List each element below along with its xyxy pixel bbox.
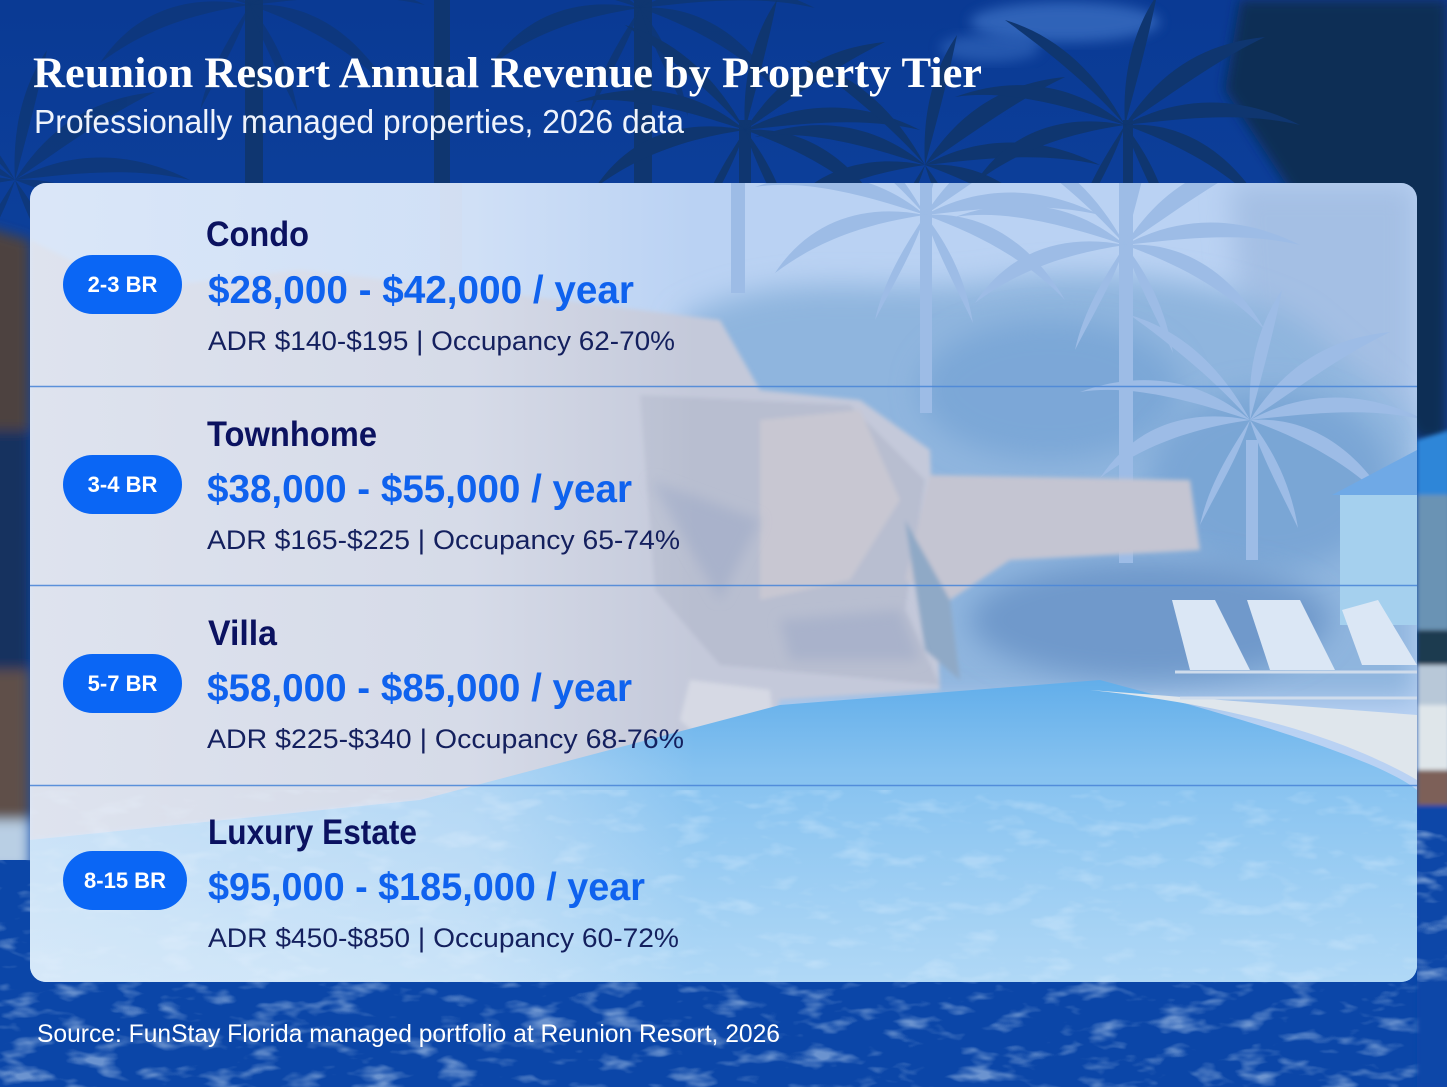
revenue range: Luxury Estate: $95,000 - $185,000 / year <box>208 866 645 909</box>
tier name: Townhome: Townhome <box>207 415 377 454</box>
metrics: Luxury Estate: ADR $450-$850 | Occupancy 60-72% <box>208 923 679 953</box>
palms against the sky <box>0 0 1300 288</box>
rocks <box>30 240 1200 840</box>
badge: 2-3 BR: 2-3 BR <box>88 272 157 297</box>
right edge scene <box>1417 430 1447 1087</box>
badge: 3-4 BR <box>63 455 182 514</box>
metrics: Townhome: ADR $165-$225 | Occupancy 65-74% <box>207 525 680 555</box>
tier name: Luxury Estate: Luxury Estate <box>208 813 417 852</box>
subtitle: Professionally managed properties, 2026 data <box>34 103 685 140</box>
dark tree top right <box>1225 0 1447 440</box>
row: Villa <box>63 614 684 754</box>
row: Townhome <box>63 415 680 555</box>
row: Condo <box>63 215 675 356</box>
panel: property tiers glass card <box>30 183 1417 982</box>
badge: 8-15 BR: 8-15 BR <box>84 868 166 893</box>
row: Luxury Estate <box>63 813 679 953</box>
tier name: Condo: Condo <box>206 215 309 254</box>
deep water <box>0 860 1447 1087</box>
revenue range: Condo: $28,000 - $42,000 / year <box>208 269 634 312</box>
badge: 5-7 BR: 5-7 BR <box>88 671 157 696</box>
white wash over left side <box>30 183 659 982</box>
badge: 8-15 BR <box>63 851 187 910</box>
badge: 5-7 BR <box>63 654 182 713</box>
source note: Source: FunStay Florida managed portfolio at Reunion Resort, 2026 <box>37 1020 780 1048</box>
left edge rocks and water <box>0 225 30 870</box>
cabana and loungers <box>1332 450 1417 495</box>
metrics: Villa: ADR $225-$340 | Occupancy 68-76% <box>207 724 684 754</box>
tier name: Villa: Villa <box>208 614 278 653</box>
badge: 3-4 BR: 3-4 BR <box>88 472 157 497</box>
metrics: Condo: ADR $140-$195 | Occupancy 62-70% <box>208 326 675 356</box>
panel scene seen through glass <box>30 183 1417 982</box>
deck <box>1090 690 1417 780</box>
pool <box>30 680 1417 982</box>
title: Reunion Resort Annual Revenue by Property Tier <box>33 50 982 97</box>
badge: 2-3 BR <box>63 255 182 314</box>
revenue range: Villa: $58,000 - $85,000 / year <box>207 667 632 710</box>
revenue range: Townhome: $38,000 - $55,000 / year <box>207 468 632 511</box>
